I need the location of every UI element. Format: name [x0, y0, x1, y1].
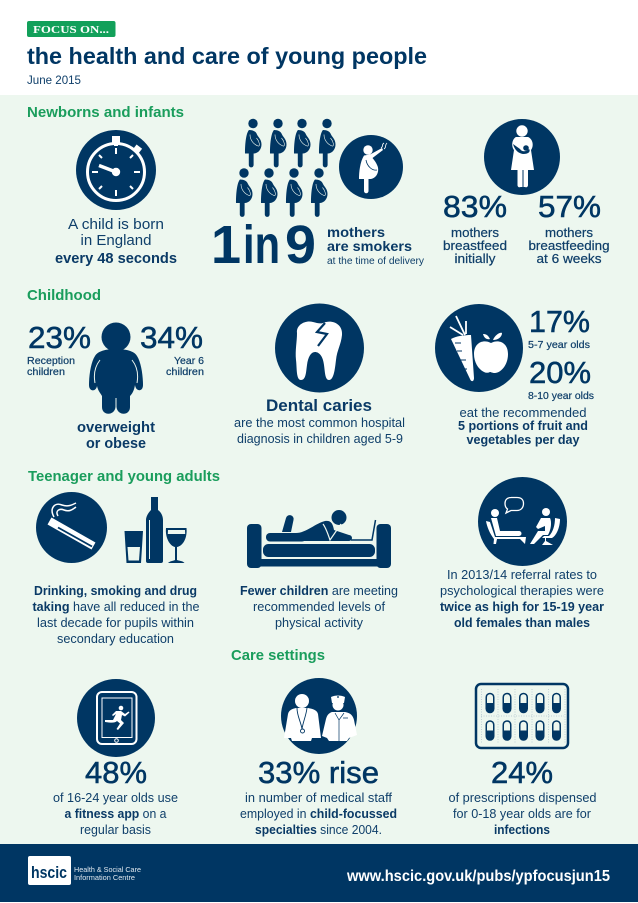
stat: 1 in 9: 9: [285, 215, 316, 275]
stat: 57 percent: at 6 weeks: [536, 251, 602, 266]
heading: newborns and infants: Newborns and infants: [27, 104, 184, 121]
text: referral rates: twice as high for 15-19 year: [440, 599, 604, 614]
stat: 57 percent: 57%: [538, 189, 601, 224]
text: dental caries: Dental caries: [266, 396, 372, 415]
text: prescriptions: 24%: [491, 755, 553, 790]
panel: prescriptions: [448, 684, 596, 837]
text: medical staff: 33% rise: [258, 755, 379, 790]
text: mothers are smokers: [327, 224, 424, 267]
stat: 34 percent: 34%: [140, 320, 203, 355]
panel: dental caries: [234, 304, 405, 446]
stat: 23 percent: [27, 320, 91, 378]
icon: stopwatch: [76, 130, 156, 210]
text: referral rates: psychological therapies were: [440, 583, 604, 598]
text: fitness app: 48%: [85, 755, 147, 790]
text: prescriptions: for 0-18 year olds are for: [453, 806, 592, 821]
text: birth rate: every 48 seconds: [55, 250, 177, 267]
icon: therapy session: [478, 477, 567, 566]
icon: tablet with runner: [77, 679, 155, 757]
panel: drinking and smoking: [32, 492, 200, 646]
text: prescriptions: infections: [494, 822, 550, 837]
panel: mothers who smoke: [211, 119, 424, 275]
text: referral rates: In 2013/14 referral rates to: [447, 567, 597, 582]
text: overweight or obese: [77, 419, 155, 452]
stat: 17 percent: 5-7 year olds: [528, 339, 590, 351]
text: birth rate: in England: [80, 232, 152, 249]
panel: physical activity: [240, 510, 398, 630]
logo: [28, 856, 141, 885]
text: fewer children: Fewer children are meeting: [240, 583, 398, 598]
text: mothers are smokers: at the time of delivery: [327, 256, 424, 267]
text: medical staff: in number of medical staff: [245, 790, 392, 805]
text: prescriptions: of prescriptions dispensed: [448, 790, 596, 805]
text: drinking smoking drugs: taking have all reduced in the: [32, 599, 200, 614]
text: fewer children: recommended levels of: [253, 599, 385, 614]
text: fitness app: of 16-24 year olds use: [53, 790, 178, 805]
panel: overweight: [27, 320, 204, 452]
text: prescriptions: [448, 755, 596, 837]
text: drinking smoking drugs: Drinking, smoking and drug: [34, 583, 197, 598]
stat: 1 in 9: in: [243, 215, 280, 275]
text: five a day: [458, 405, 588, 447]
heading: childhood: Childhood: [27, 287, 101, 304]
icon: overweight child: [89, 322, 143, 414]
stat: 57 percent: mothers: [545, 225, 594, 240]
text: drinking smoking drugs: secondary education: [57, 631, 174, 646]
stat: 83 percent: initially: [454, 251, 496, 266]
focus on badge: FOCUS ON...: [33, 24, 109, 36]
text: dental caries: [234, 396, 405, 446]
text: dental caries: are the most common hospital: [234, 416, 405, 430]
stat: 34 percent: children: [166, 367, 204, 378]
icon: mother and baby: [484, 119, 560, 195]
stat: 23 percent: 23%: [28, 320, 91, 355]
logo: Health & Social Care: [74, 865, 141, 874]
header: [27, 21, 427, 87]
icon: cigarette: [36, 492, 107, 563]
stat: 57 percent: [528, 189, 610, 266]
stat: 17 percent: 17%: [529, 304, 590, 339]
stat: 1 in 9: [211, 215, 316, 275]
stat: 23 percent: Reception: [27, 356, 75, 367]
text: medical staff: specialties since 2004.: [255, 822, 382, 837]
text: dental caries: diagnosis in children aged 5-9: [237, 432, 403, 446]
text: mothers are smokers: are smokers: [327, 238, 412, 254]
text: medical staff: [240, 755, 397, 837]
website url: www.hscic.gov.uk/pubs/ypfocusjun15: [346, 868, 610, 885]
text: overweight or obese: overweight: [77, 419, 155, 436]
text: mothers are smokers: mothers: [327, 224, 385, 240]
text: drinking smoking drugs: [32, 583, 200, 646]
stat: 83 percent: 83%: [443, 189, 507, 224]
title: the health and care of young people: [27, 43, 427, 69]
date: June 2015: [27, 73, 81, 87]
logo: Information Centre: [74, 873, 135, 882]
text: five a day: 5 portions of fruit and: [458, 418, 588, 433]
text: referral rates: old females than males: [454, 615, 590, 630]
panel: medical staff: [240, 678, 397, 837]
stat: 20 percent: 20%: [529, 355, 591, 390]
heading: teenager and young adults: Teenager and young adults: [28, 468, 220, 485]
stat: 57 percent: breastfeeding: [528, 238, 610, 253]
icon: carrot and apple: [435, 304, 523, 392]
text: birth rate: [55, 216, 177, 267]
heading: care settings: Care settings: [231, 647, 325, 664]
icon: blister pack: [476, 684, 568, 748]
text: fewer children: [240, 583, 398, 630]
logo: hscic: [31, 863, 67, 882]
icon: doctor and nurse: [281, 678, 357, 754]
text: fitness app: a fitness app on a: [64, 806, 167, 821]
icon: nine pregnant figures: [236, 119, 336, 217]
panel: psychological therapies: [440, 477, 604, 630]
stat: 20 percent: 8-10 year olds: [528, 390, 594, 402]
text: fitness app: [53, 755, 178, 837]
stat: 23 percent: children: [27, 367, 65, 378]
text: fitness app: regular basis: [80, 822, 151, 837]
stat: 34 percent: [140, 320, 204, 378]
stat: 83 percent: [443, 189, 507, 266]
stat: 34 percent: Year 6: [174, 356, 204, 367]
text: birth rate: A child is born: [68, 216, 164, 233]
text: five a day: eat the recommended: [460, 405, 586, 420]
focus on badge: [27, 21, 116, 37]
icon: tooth: [275, 304, 364, 392]
stat: 83 percent: breastfeed: [443, 238, 507, 253]
panel: breastfeeding: [443, 119, 610, 266]
icon: drinks: [124, 497, 187, 563]
text: five a day: vegetables per day: [466, 432, 580, 447]
icon: child on sofa with laptop: [247, 510, 391, 568]
panel: fruit and vegetables: [435, 304, 594, 447]
text: medical staff: employed in child-focussed: [240, 806, 397, 821]
panel: birth rate: [55, 130, 177, 267]
icon: smoking mother: [339, 135, 403, 199]
text: fewer children: physical activity: [275, 615, 363, 630]
panel: fitness app: [53, 679, 178, 837]
text: drinking smoking drugs: last decade for pupils within: [37, 615, 194, 630]
footer: [0, 844, 638, 902]
stat: 83 percent: mothers: [451, 225, 500, 240]
text: referral rates: [440, 567, 604, 630]
stat: 1 in 9: 1: [211, 215, 241, 275]
text: overweight or obese: or obese: [86, 435, 146, 452]
